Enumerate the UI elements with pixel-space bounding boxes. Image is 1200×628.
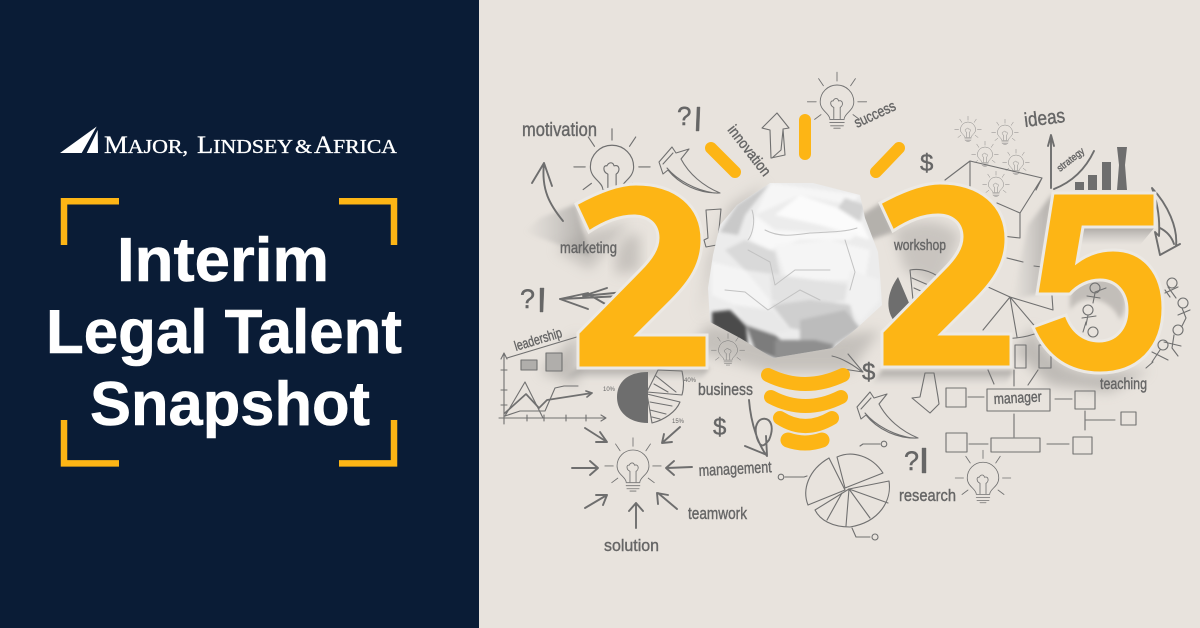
sketch labels: marketing	[560, 240, 617, 257]
light rays above the bulb	[711, 120, 899, 172]
sketch labels: workshop	[893, 237, 946, 254]
frame brackets	[64, 201, 394, 463]
sketch labels: ideas	[1023, 105, 1066, 132]
icons: light bulbs	[574, 72, 1029, 503]
icons: curved and block arrows	[532, 113, 939, 456]
title: Interim Legal Talent Snapshot: Interim	[117, 226, 329, 295]
sketch labels: teaching	[1100, 376, 1147, 393]
chart: line chart and leadership bars	[499, 336, 606, 424]
chart: outlined pie chart with callouts	[778, 441, 889, 540]
chart: grey pie chart with hatched wedges	[603, 370, 697, 425]
chart: workshop pie chart	[888, 270, 945, 329]
sketch labels: strategy	[1055, 146, 1087, 174]
panel: beige sketch background	[479, 0, 1200, 628]
chart: grey pie chart with hatched wedges: 10%	[603, 387, 616, 393]
sketch illustrations behind the numerals	[499, 72, 1190, 555]
icons: dollar signs	[713, 150, 933, 441]
logo: Major, Lindsey & Africa: AFRICA	[314, 132, 397, 159]
sketch labels: solution	[604, 536, 659, 555]
drop shadows of the numerals and paper ball	[524, 183, 1155, 392]
icons: question marks and exclamation points	[520, 101, 926, 476]
icons: arrows pointing at the solution bulb	[572, 427, 692, 528]
sketch labels: innovation	[724, 122, 774, 180]
icons: dollar signs: $	[920, 150, 933, 177]
icons: question marks and exclamation points: ?	[520, 284, 535, 314]
logo: Major, Lindsey & Africa: MAJOR,	[104, 132, 188, 159]
chart: strategy growth bars	[1048, 135, 1127, 190]
light bulb base bands	[768, 375, 843, 443]
sketch labels: teamwork	[688, 504, 747, 523]
sketch labels: business	[698, 380, 753, 399]
numeral: second 2	[880, 183, 1011, 367]
icon: chain of climbing stick figures	[1082, 278, 1190, 368]
chart: grey pie chart with hatched wedges: 40%	[684, 378, 697, 384]
logo: Major, Lindsey & Africa	[60, 126, 397, 159]
crumpled paper ball	[708, 183, 882, 358]
logo: Major, Lindsey & Africa: &	[295, 136, 312, 158]
panel: navy title panel	[0, 0, 479, 628]
numeral: first 2	[576, 184, 707, 368]
sketch labels: success	[852, 98, 899, 132]
icons: dollar signs: $	[862, 359, 875, 386]
sketch labels	[512, 98, 1147, 555]
sketch labels: manager	[993, 389, 1042, 408]
sketch labels: research	[899, 486, 956, 505]
chart: grey pie chart with hatched wedges: 15%	[672, 419, 685, 425]
chart: manager organisation diagram	[946, 345, 1136, 454]
sketch labels: leadership	[512, 324, 564, 354]
title: Interim Legal Talent Snapshot: Snapshot	[90, 370, 370, 439]
sketch labels: management	[698, 459, 773, 480]
title: Interim Legal Talent Snapshot	[46, 226, 402, 439]
icons: dollar signs: $	[713, 414, 726, 441]
chart: open box and fan sketch	[945, 161, 1053, 338]
title: Interim Legal Talent Snapshot: Legal Talent	[46, 298, 402, 367]
sketch labels: motivation	[522, 120, 597, 141]
icons: question marks and exclamation points: ?	[904, 446, 919, 476]
icons: question marks and exclamation points: ?	[677, 101, 691, 131]
logo: Major, Lindsey & Africa: LINDSEY	[197, 132, 293, 159]
numeral: 5	[1033, 193, 1163, 373]
icon: curved arrow beside the 5	[1152, 188, 1180, 255]
